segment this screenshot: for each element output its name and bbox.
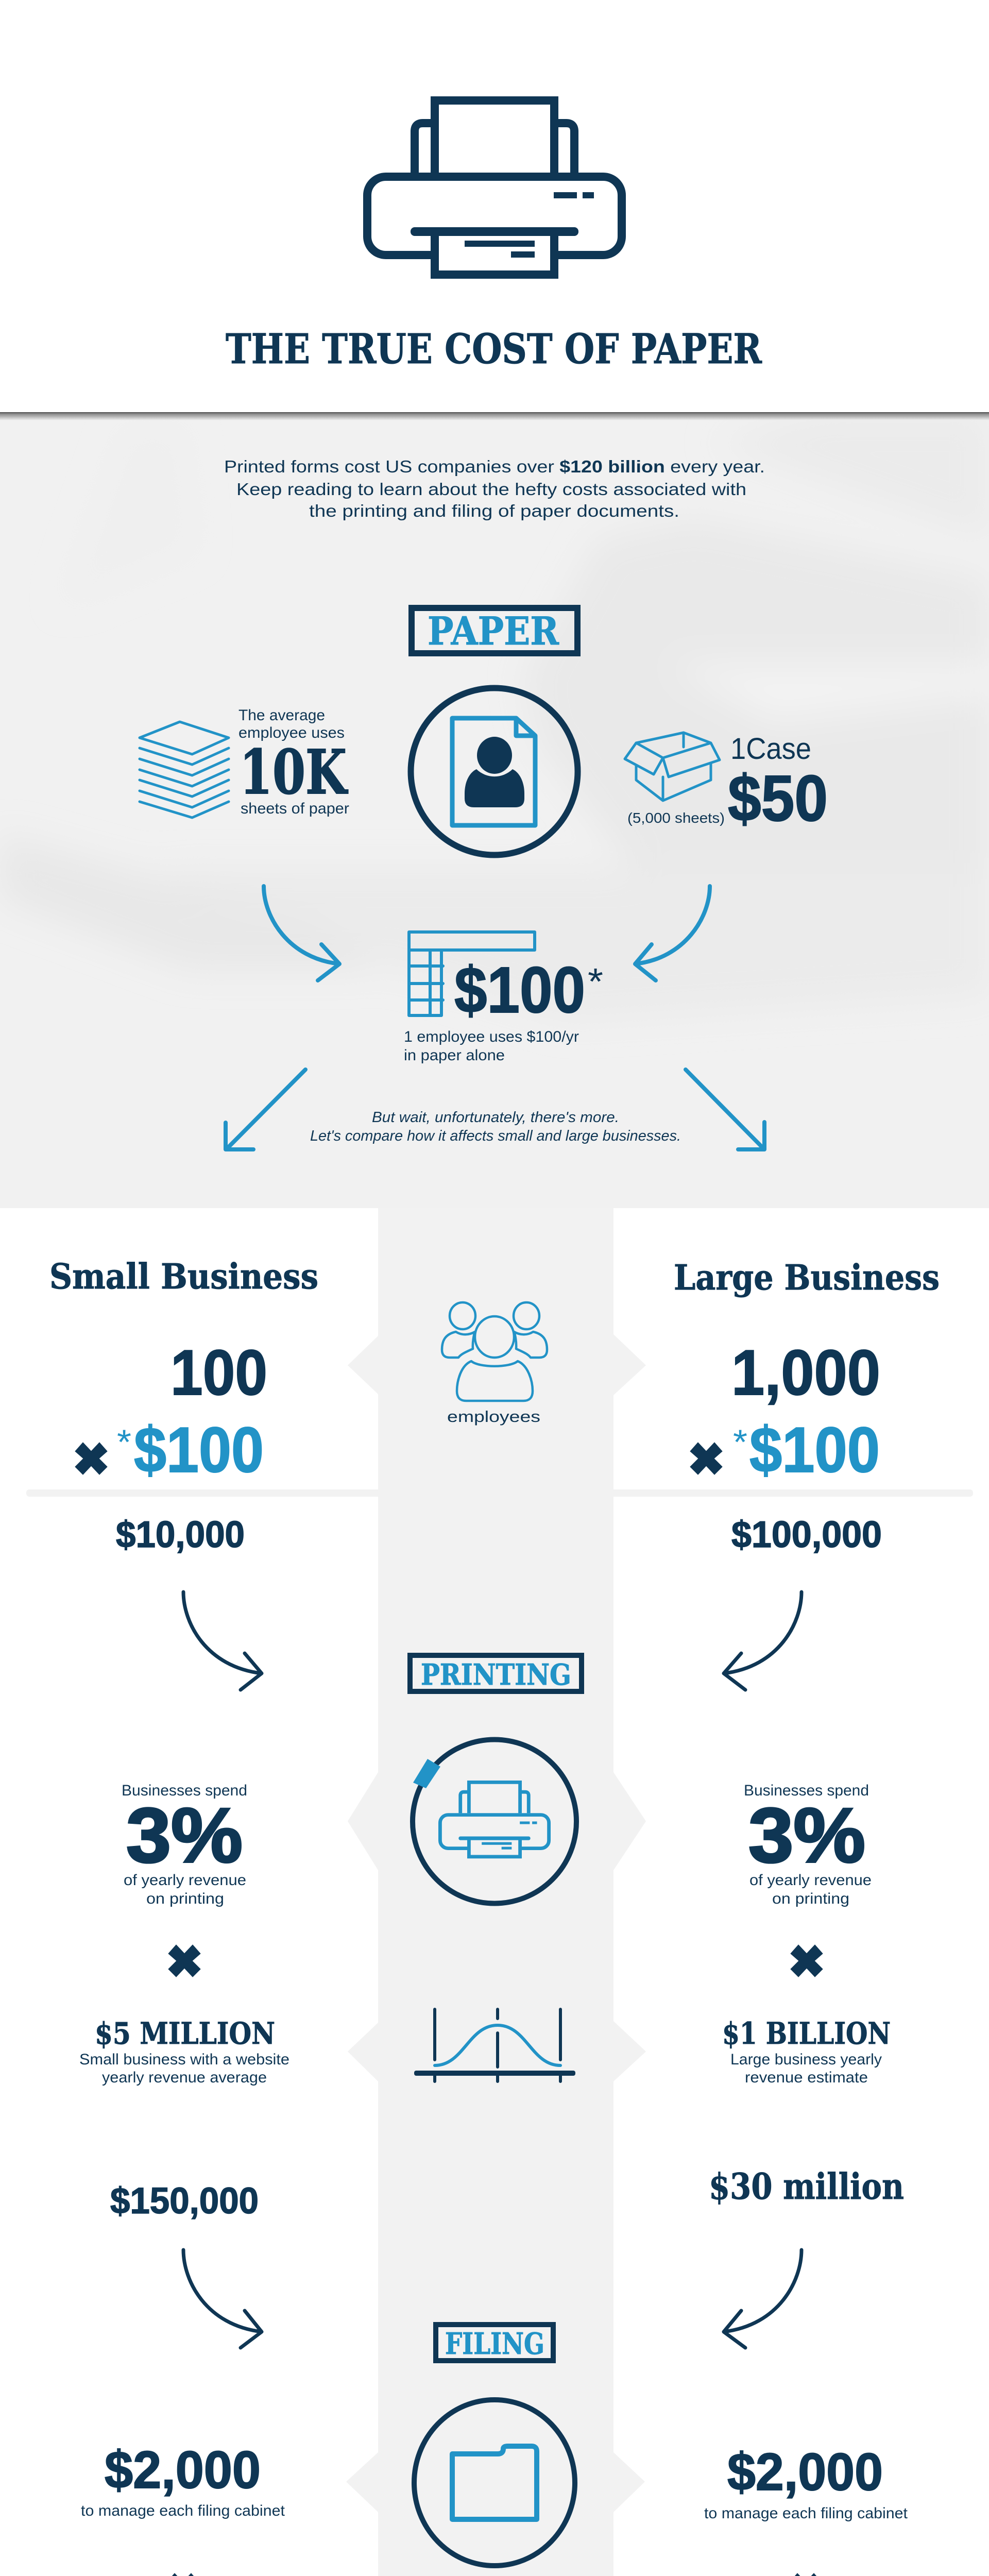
column headings: Large Business — [674, 1257, 940, 1298]
small business: printing spend: $5 MILLION — [95, 2016, 275, 2051]
icon: multiply — [168, 1945, 200, 1977]
transition text — [310, 1109, 681, 1144]
large business: printing spend — [709, 1782, 904, 2208]
intro text: Printed forms cost US companies over $120 billion every year. — [224, 457, 765, 476]
icon: multiply — [690, 1443, 722, 1475]
arrow: small business to filing — [183, 2250, 262, 2348]
transition text: Let's compare how it affects small and large businesses. — [310, 1128, 681, 1144]
stat: 10K sheets: 10K — [240, 736, 348, 808]
stat: $100 per employee: 1 employee uses $100/yr — [404, 1028, 579, 1045]
column headings — [49, 1256, 940, 1298]
icon: multiply — [75, 1443, 107, 1475]
arrow: large business to printing — [724, 1592, 802, 1690]
small business: paper calculation: 100 — [170, 1337, 267, 1409]
large business: printing spend: $30 million — [709, 2166, 904, 2208]
icon: printer in circle — [413, 1739, 576, 1903]
center column: comparison strip — [26, 1208, 973, 2576]
small business: printing spend: of yearly revenue — [124, 1872, 246, 1889]
icon: multiply — [167, 2573, 199, 2576]
large business: printing spend: of yearly revenue — [749, 1872, 872, 1889]
small business: paper calculation: * — [117, 1422, 131, 1462]
icon: multiply — [791, 1945, 823, 1977]
arrow: large business to filing — [724, 2250, 802, 2348]
large business: printing spend: 3% — [748, 1792, 865, 1878]
label: employees: employees — [447, 1408, 540, 1426]
icon: employees group — [442, 1302, 547, 1401]
stat: $100 per employee: $100 — [454, 954, 585, 1026]
small business: printing spend: Businesses spend — [122, 1782, 247, 1799]
transition text: But wait, unfortunately, there's more. — [372, 1109, 619, 1126]
small business: printing spend: yearly revenue average — [102, 2069, 267, 2086]
small business: paper calculation — [75, 1337, 267, 1555]
stat: $100 per employee: * — [588, 961, 603, 1003]
large business: paper calculation — [690, 1337, 882, 1555]
large business: filing cost: $2,000 — [727, 2443, 883, 2501]
large business: printing spend: Large business yearly — [730, 2051, 882, 2068]
large business: paper calculation: $100 — [749, 1415, 880, 1486]
large business: printing spend: Businesses spend — [744, 1782, 869, 1799]
stat: 10K sheets — [238, 707, 349, 817]
stat: one case costs $50: 1Case — [730, 732, 811, 766]
icon: spreadsheet table — [409, 932, 535, 1015]
background: paper photo band — [0, 412, 989, 1208]
small business: filing cost: to manage each filing cabinet — [81, 2502, 285, 2519]
large business: printing spend: on printing — [772, 1890, 849, 1907]
stat: one case costs $50 — [627, 732, 828, 835]
arrow: down right — [686, 1070, 764, 1149]
small business: filing cost: $2,000 — [105, 2441, 261, 2499]
heading: PRINTING: PRINTING — [421, 1658, 571, 1692]
heading: FILING: FILING — [445, 2327, 544, 2361]
stat: $100 per employee: in paper alone — [404, 1047, 505, 1064]
large business: paper calculation: $100,000 — [731, 1514, 882, 1555]
arrow: left curve to $100 — [264, 886, 339, 980]
icon: large printer — [367, 100, 622, 275]
icon: open box — [625, 733, 720, 801]
intro text: the printing and filing of paper documents. — [309, 501, 679, 520]
intro text: Keep reading to learn about the hefty costs associated with — [236, 480, 746, 499]
large business: filing cost: to manage each filing cabinet — [704, 2505, 908, 2522]
small business: printing spend: 3% — [126, 1792, 243, 1878]
small business: printing spend: Small business with a website — [79, 2051, 289, 2068]
arrow: small business to printing — [183, 1592, 262, 1690]
arrow: down left — [226, 1070, 305, 1149]
large business: paper calculation: * — [733, 1422, 747, 1462]
icon: stack of sheets — [140, 722, 229, 818]
arrow: right curve to $100 — [635, 886, 710, 980]
section: paper — [140, 608, 828, 1149]
stat: $100 per employee — [404, 954, 603, 1064]
large business: printing spend: revenue estimate — [745, 2069, 868, 2086]
icon: person document in circle — [411, 688, 578, 855]
intro text — [224, 457, 765, 520]
small business: paper calculation: $10,000 — [116, 1514, 245, 1555]
icon: bell curve chart — [414, 2009, 575, 2081]
small business: printing spend: $150,000 — [110, 2181, 259, 2222]
stat: one case costs $50: $50 — [728, 762, 828, 835]
column headings: Small Business — [49, 1256, 318, 1297]
heading: PAPER: PAPER — [428, 608, 559, 654]
small business: filing cost — [81, 2441, 285, 2576]
icon: multiply — [790, 2573, 822, 2576]
small business: printing spend: on printing — [146, 1890, 224, 1907]
stat: one case costs $50: (5,000 sheets) — [627, 810, 725, 826]
title: THE TRUE COST OF PAPER — [226, 325, 762, 373]
large business: printing spend: $1 BILLION — [722, 2016, 891, 2051]
stat: 10K sheets: employee uses — [238, 724, 345, 741]
large business: filing cost — [704, 2443, 908, 2576]
large business: paper calculation: 1,000 — [731, 1337, 880, 1409]
small business: printing spend — [79, 1782, 289, 2222]
icon: folder in circle — [414, 2400, 575, 2566]
stat: 10K sheets: The average — [238, 707, 325, 724]
stat: 10K sheets: sheets of paper — [241, 800, 349, 817]
small business: paper calculation: $100 — [134, 1415, 264, 1486]
